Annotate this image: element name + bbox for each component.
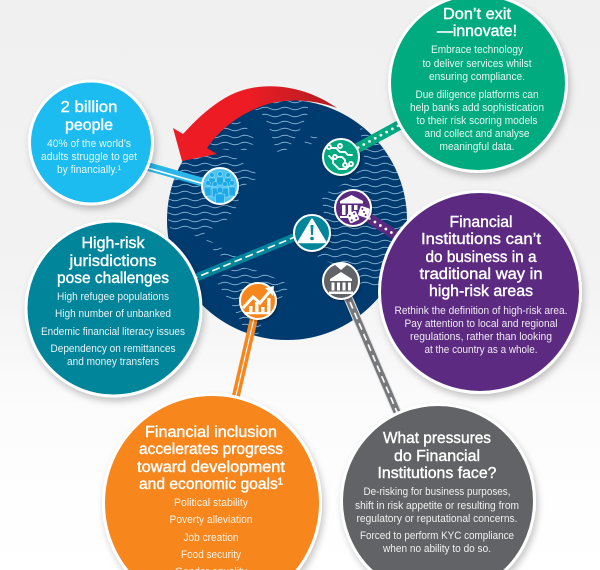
text: financial inclusion list: Job creation [184, 532, 238, 544]
connector: gray bank [341, 281, 397, 412]
heading: don't exit [437, 6, 517, 40]
heading: 2 billion people [60, 99, 118, 134]
icon: people [202, 168, 238, 204]
heading: traditional way: do business in a [426, 249, 537, 266]
connector: warning [190, 230, 312, 280]
text: high-risk list: Dependency on remittances [50, 343, 176, 355]
text: don't exit body: and collect and analyse [424, 128, 530, 140]
text: don't exit body: Due diligence platforms can [416, 89, 538, 101]
text: high-risk list: High refugee populations [57, 291, 169, 303]
text: high-risk list: and money transfers [67, 356, 159, 368]
heading: traditional way: Institutions can’t [421, 231, 542, 248]
heading: financial inclusion [137, 424, 286, 493]
text: high-risk list: Endemic financial literacy issues [41, 326, 185, 338]
connector: orange [235, 301, 258, 400]
text: don't exit body: ensuring compliance. [429, 71, 525, 83]
heading: traditional way: traditional way in [420, 266, 542, 283]
text: pressures body: Forced to perform KYC compliance [360, 530, 514, 542]
heading: pressures: Institutions face? [378, 465, 497, 482]
text: 2 billion body [41, 138, 138, 176]
text: traditional way body: Rethink the definition of high-risk area. [394, 305, 568, 317]
text: financial inclusion list: Food security [181, 549, 241, 561]
heading: traditional way: Financial [450, 214, 512, 231]
text: don't exit body: Embrace technology [431, 44, 523, 56]
text: traditional way body: at the country as a whole. [424, 344, 538, 356]
text: don't exit body: help banks add sophistication [410, 102, 544, 114]
text: pressures body: when no ability to do so. [382, 543, 491, 555]
text: high-risk list: High number of unbanked [55, 308, 171, 320]
connector: people [146, 166, 220, 188]
heading: financial inclusion: and economic goals¹ [139, 476, 283, 493]
icon: gray bank [323, 263, 359, 299]
heading: 2 billion people: 2 billion [60, 99, 118, 116]
heading: pressures [378, 430, 497, 482]
heading: traditional way: high-risk areas [429, 283, 533, 300]
text: financial inclusion list: Poverty alleviation [170, 514, 252, 526]
globe [163, 100, 412, 340]
icon: circuit [323, 139, 359, 175]
text: traditional way body: regulations, rather than looking [410, 331, 552, 343]
heading: financial inclusion: accelerates progress [139, 441, 283, 458]
heading: financial inclusion: toward development [137, 459, 286, 476]
panel: don't exit [390, 0, 566, 172]
text: pressures body [355, 486, 519, 555]
heading: pressures: do Financial [394, 448, 480, 465]
panel: pressures [342, 404, 534, 570]
heading: high-risk jurisdictions: pose challenges [57, 270, 169, 287]
heading: high-risk jurisdictions: jurisdictions [68, 253, 156, 270]
heading: high-risk jurisdictions: High-risk [82, 235, 145, 252]
text: traditional way body [394, 305, 568, 356]
connector: bank and dice [353, 208, 400, 238]
text: don't exit body: meaningful data. [440, 141, 514, 153]
text: high-risk list [41, 291, 185, 368]
arrow: red curved arrow [173, 86, 337, 161]
icon: bank and dice [335, 190, 371, 226]
text: financial inclusion list: Political stability [174, 497, 248, 509]
heading: high-risk jurisdictions [57, 235, 169, 287]
text: don't exit body: to their risk scoring models [416, 115, 538, 127]
heading: pressures: What pressures [383, 430, 491, 447]
text: traditional way body: Pay attention to local and regional [404, 318, 558, 330]
panel: financial inclusion [104, 394, 320, 570]
heading: 2 billion people: people [65, 117, 113, 134]
text: pressures body: De-risking for business purposes, [364, 486, 510, 498]
icon: warning [294, 215, 330, 251]
text: 2 billion body: by financially.¹ [57, 164, 121, 176]
text: don't exit body: to deliver services whilst [422, 58, 532, 70]
panel: high-risk jurisdictions [26, 221, 201, 396]
connector: circuit [341, 122, 405, 157]
text: 2 billion body: adults struggle to get [41, 151, 138, 163]
icon: growth chart [240, 283, 276, 319]
text: 2 billion body: 40% of the world’s [47, 138, 131, 150]
panel: traditional way [380, 192, 580, 392]
heading: traditional way [420, 214, 542, 300]
heading: don't exit: Don’t exit [443, 6, 512, 23]
text: financial inclusion list [170, 497, 252, 570]
text: pressures body: regulatory or reputational concerns. [356, 513, 518, 525]
heading: financial inclusion: Financial inclusion [145, 424, 277, 441]
text: don't exit body [410, 44, 544, 153]
heading: don't exit: —innovate! [437, 23, 517, 40]
text: pressures body: shift in risk appetite or resulting from [355, 500, 519, 512]
panel: 2 billion people [30, 81, 152, 204]
